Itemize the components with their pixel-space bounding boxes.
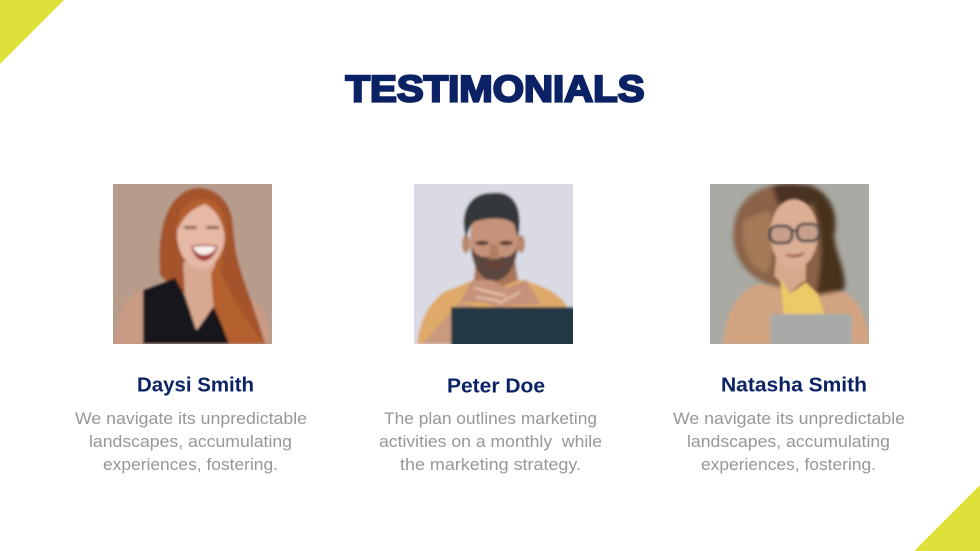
quote: the marketing strategy. bbox=[400, 455, 581, 474]
title: TESTIMONIALS bbox=[346, 68, 644, 110]
name: Daysi Smith bbox=[137, 374, 254, 396]
quote: The plan outlines marketing bbox=[384, 409, 597, 428]
name: Natasha Smith bbox=[721, 374, 867, 396]
jacket bbox=[723, 284, 870, 344]
testimonial: Natasha Smith bbox=[673, 374, 905, 474]
eyes bbox=[184, 226, 197, 229]
testimonial: Daysi Smith bbox=[75, 374, 307, 474]
photo: Natasha Smith bbox=[710, 184, 869, 344]
decorative corner triangle top-left bbox=[0, 0, 64, 64]
glasses bbox=[770, 224, 819, 243]
quote: We navigate its unpredictable bbox=[673, 409, 905, 428]
decorative corner triangle bottom-right bbox=[914, 485, 980, 551]
quote: experiences, fostering. bbox=[103, 455, 278, 474]
eyes bbox=[475, 241, 489, 245]
neck bbox=[472, 260, 520, 287]
beard bbox=[471, 246, 518, 281]
quote: landscapes, accumulating bbox=[687, 432, 890, 451]
face bbox=[177, 199, 225, 269]
hair front bbox=[178, 199, 263, 344]
back hair bbox=[159, 188, 265, 344]
blouse bbox=[780, 278, 825, 317]
shirt bbox=[417, 280, 567, 344]
photo: Peter Doe bbox=[414, 184, 573, 344]
curly hair bbox=[733, 184, 845, 296]
ears bbox=[462, 235, 470, 253]
hands bbox=[460, 280, 541, 307]
photo: Daysi Smith bbox=[113, 184, 272, 344]
smile bbox=[191, 244, 218, 261]
forearm bbox=[424, 302, 474, 344]
quote bbox=[673, 409, 905, 474]
quote bbox=[379, 409, 602, 474]
quote bbox=[75, 409, 307, 474]
testimonial: Peter Doe bbox=[379, 376, 602, 474]
quote: experiences, fostering. bbox=[701, 455, 876, 474]
quote: We navigate its unpredictable bbox=[75, 409, 307, 428]
neck bbox=[774, 256, 806, 292]
hair bbox=[464, 193, 520, 238]
shoulders bbox=[115, 290, 271, 344]
laptop bbox=[770, 314, 852, 348]
nose and mouth bbox=[489, 244, 500, 259]
name: Peter Doe bbox=[447, 376, 545, 398]
black top bbox=[143, 278, 231, 344]
quote: landscapes, accumulating bbox=[89, 432, 292, 451]
neck and chest bbox=[183, 262, 221, 330]
face bbox=[770, 199, 818, 269]
mouth bbox=[786, 253, 804, 257]
quote: activities on a monthly while bbox=[379, 432, 602, 451]
face bbox=[468, 216, 520, 258]
laptop bbox=[451, 307, 577, 347]
